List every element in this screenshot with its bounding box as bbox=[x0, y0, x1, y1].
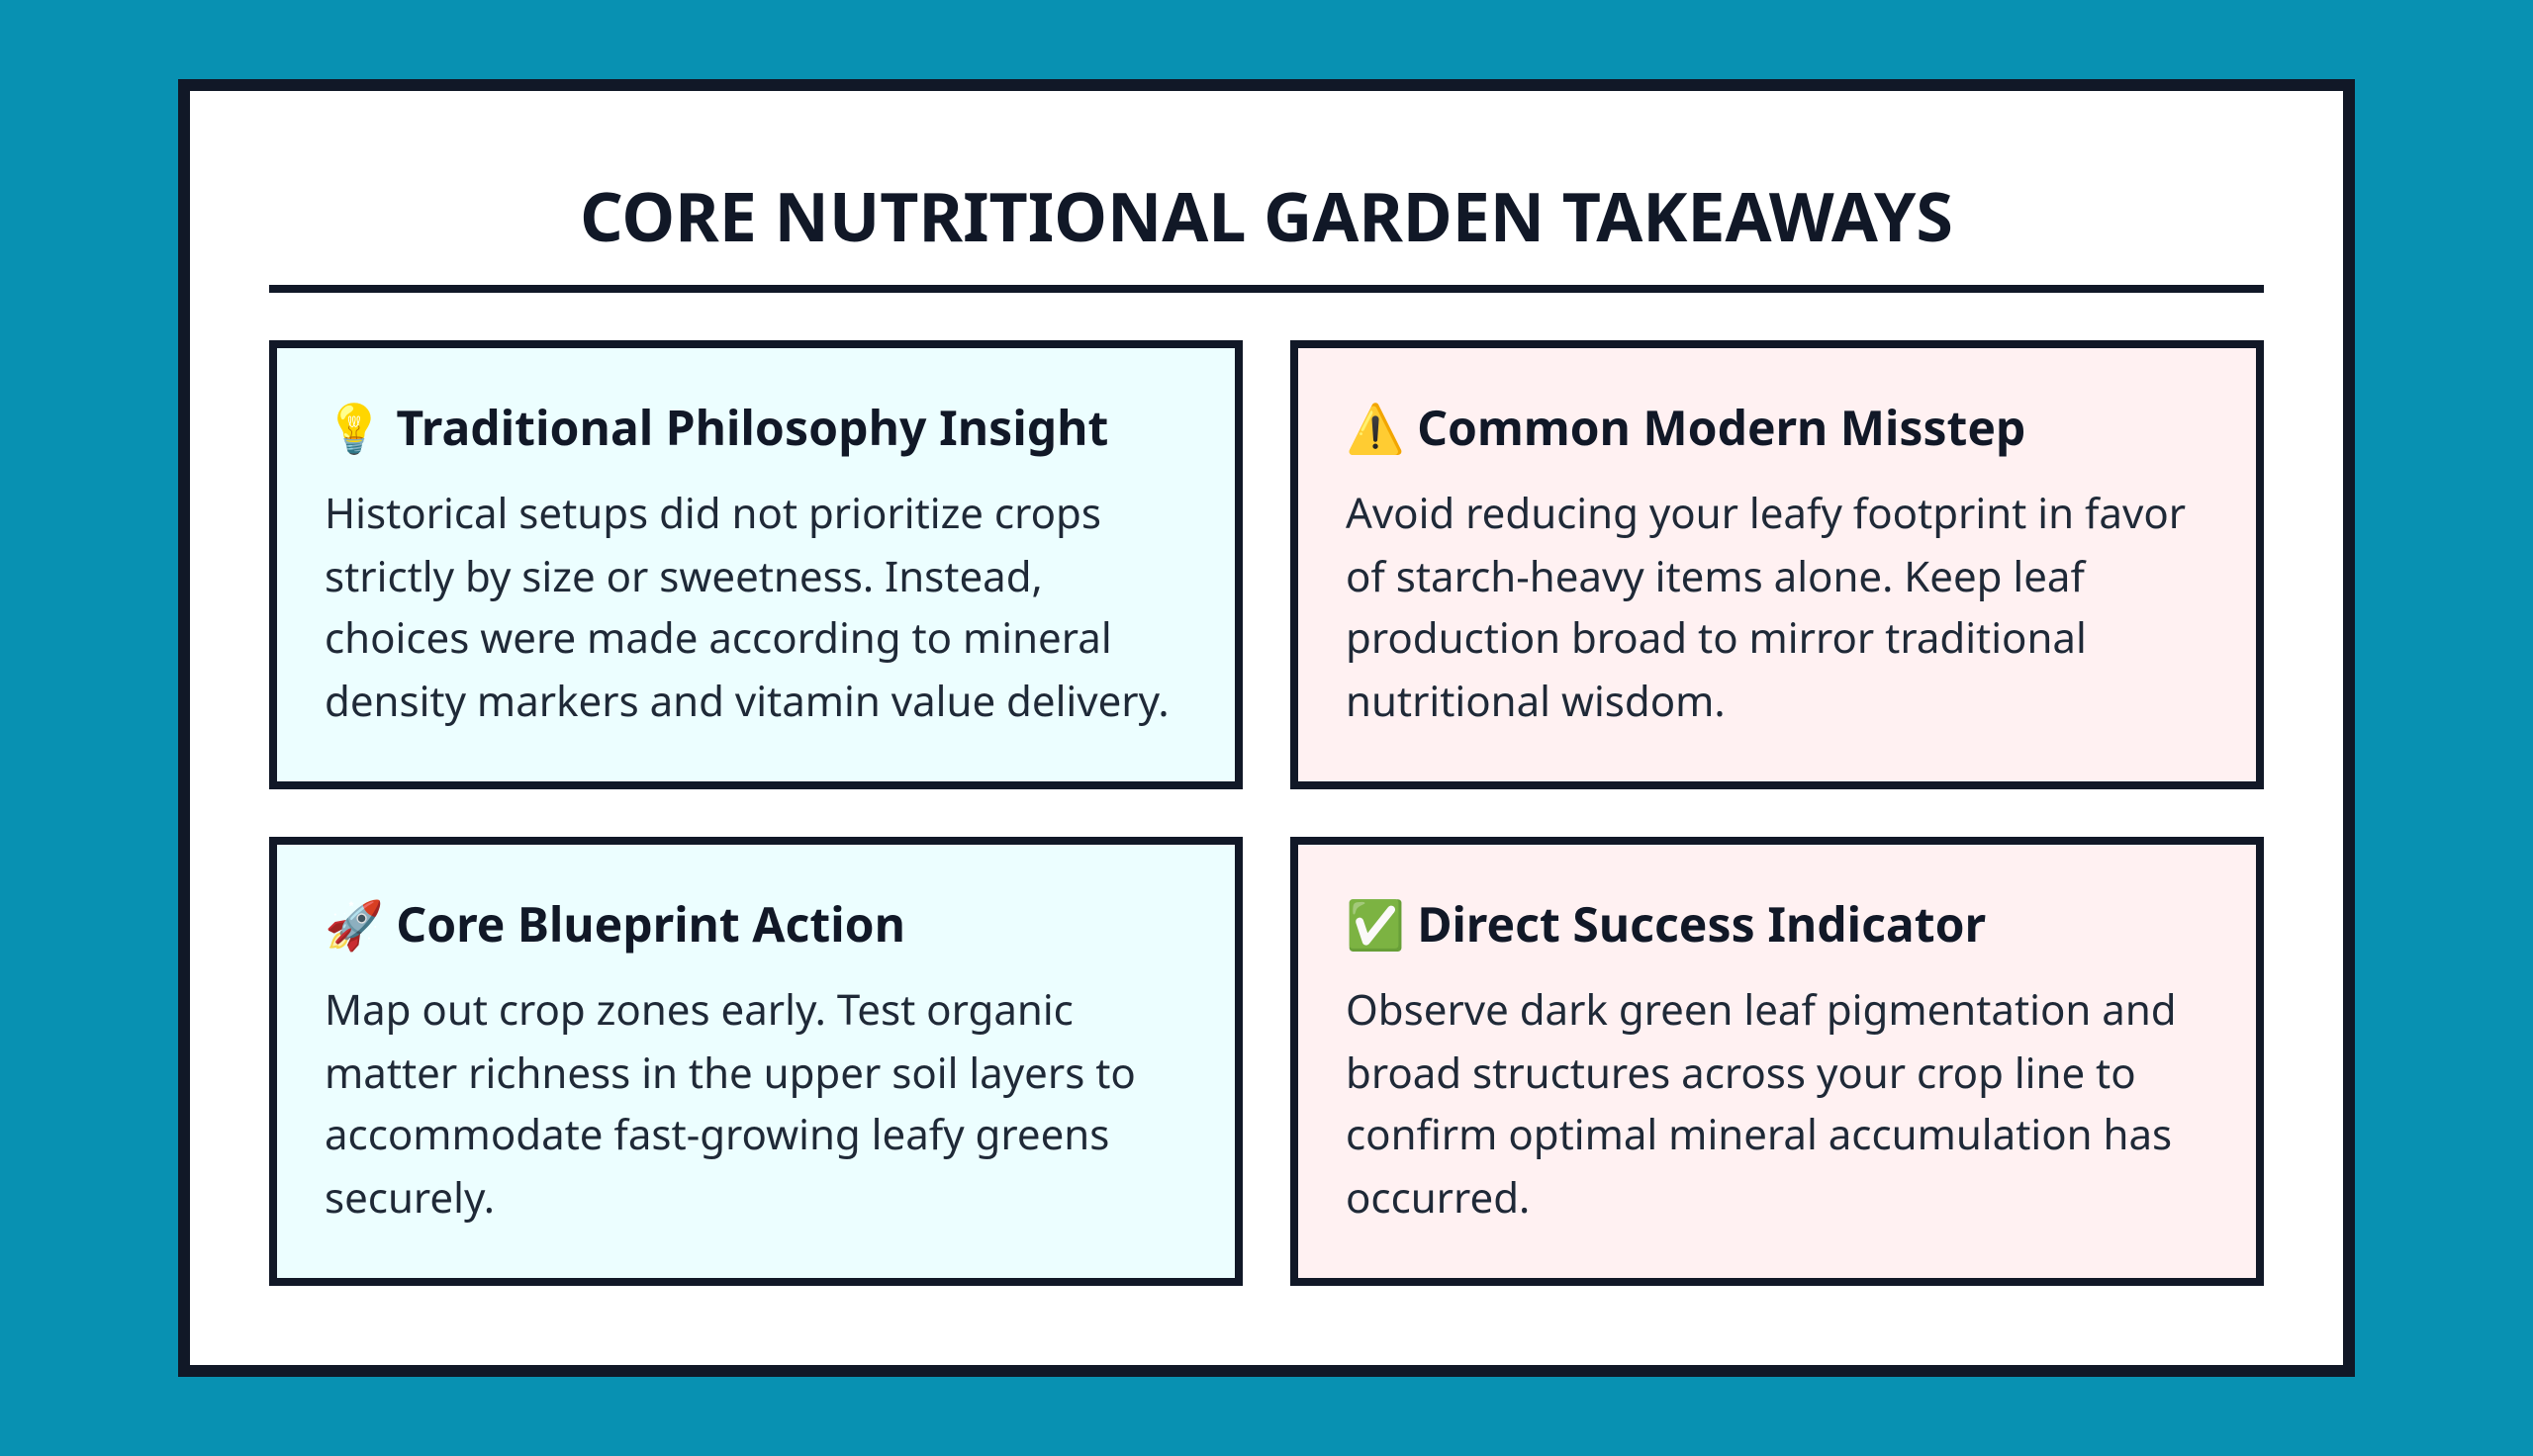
text block: misstep description: of starch-heavy items alone. Keep leaf bbox=[1346, 548, 2085, 604]
text block: indicator description: broad structures across your crop line to bbox=[1346, 1045, 2136, 1101]
panel: common modern misstep bbox=[1290, 340, 2264, 789]
text block: action description: Map out crop zones early. Test organic bbox=[325, 981, 1074, 1038]
text block: indicator description: Observe dark green leaf pigmentation and bbox=[1346, 981, 2177, 1038]
text block: insight description bbox=[325, 485, 1170, 729]
text block: insight description: choices were made according to mineral bbox=[325, 609, 1112, 666]
panel: traditional philosophy insight bbox=[269, 340, 1243, 789]
text block: insight description: density markers and vitamin value delivery. bbox=[325, 673, 1170, 729]
text block: insight description: Historical setups did not prioritize crops bbox=[325, 485, 1101, 541]
heading: direct success indicator: ✅ Direct Success Indicator bbox=[1346, 892, 1986, 956]
main white panel bbox=[178, 79, 2355, 1377]
text block: action description: accommodate fast-growing leafy greens bbox=[325, 1106, 1109, 1162]
text block: action description bbox=[325, 981, 1136, 1226]
text block: indicator description: confirm optimal mineral accumulation has bbox=[1346, 1106, 2172, 1162]
title underline bbox=[269, 285, 2264, 293]
text block: action description: matter richness in the upper soil layers to bbox=[325, 1045, 1136, 1101]
text block: indicator description bbox=[1346, 981, 2177, 1226]
text block: indicator description: occurred. bbox=[1346, 1169, 1530, 1226]
text block: misstep description bbox=[1346, 485, 2186, 729]
panel: direct success indicator bbox=[1290, 837, 2264, 1286]
text block: misstep description: Avoid reducing your leafy footprint in favor bbox=[1346, 485, 2186, 541]
heading: core blueprint action: 🚀 Core Blueprint Action bbox=[325, 892, 905, 956]
heading: traditional philosophy insight: 💡 Traditional Philosophy Insight bbox=[325, 396, 1108, 460]
text block: misstep description: production broad to mirror traditional bbox=[1346, 609, 2087, 666]
text block: action description: securely. bbox=[325, 1169, 495, 1226]
text block: insight description: strictly by size or sweetness. Instead, bbox=[325, 548, 1043, 604]
text block: misstep description: nutritional wisdom. bbox=[1346, 673, 1726, 729]
title: CORE NUTRITIONAL GARDEN TAKEAWAYS bbox=[580, 169, 1953, 261]
panel: core blueprint action bbox=[269, 837, 1243, 1286]
heading: common modern misstep: ⚠️ Common Modern Misstep bbox=[1346, 396, 2025, 460]
